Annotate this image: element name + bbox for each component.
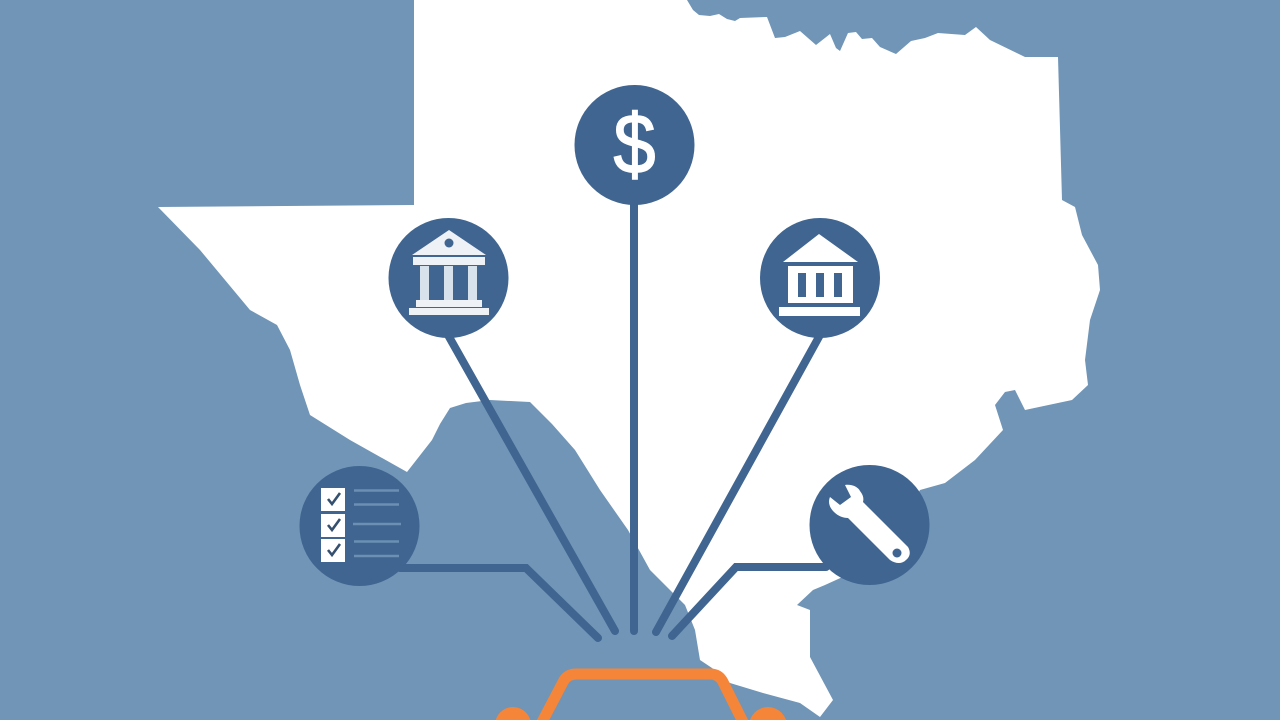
- line: checklist: [400, 568, 598, 638]
- car: orange roof and wheels: [495, 674, 787, 720]
- icon: wrench: [810, 465, 930, 585]
- map: Texas silhouette: [158, 0, 1100, 717]
- line: wrench: [672, 567, 826, 636]
- icon: columned bank: [388, 218, 508, 338]
- icon: dollar: $: [613, 97, 656, 191]
- icon: checklist: [300, 466, 420, 586]
- car wheels: [495, 707, 787, 720]
- connector lines: [400, 200, 826, 638]
- car roof outline: [541, 674, 744, 720]
- icon: building bank: [760, 218, 880, 338]
- line: right bank: [656, 335, 820, 632]
- icon: dollar: [574, 85, 694, 205]
- line: dollar: [630, 200, 638, 631]
- line: left bank: [448, 335, 615, 631]
